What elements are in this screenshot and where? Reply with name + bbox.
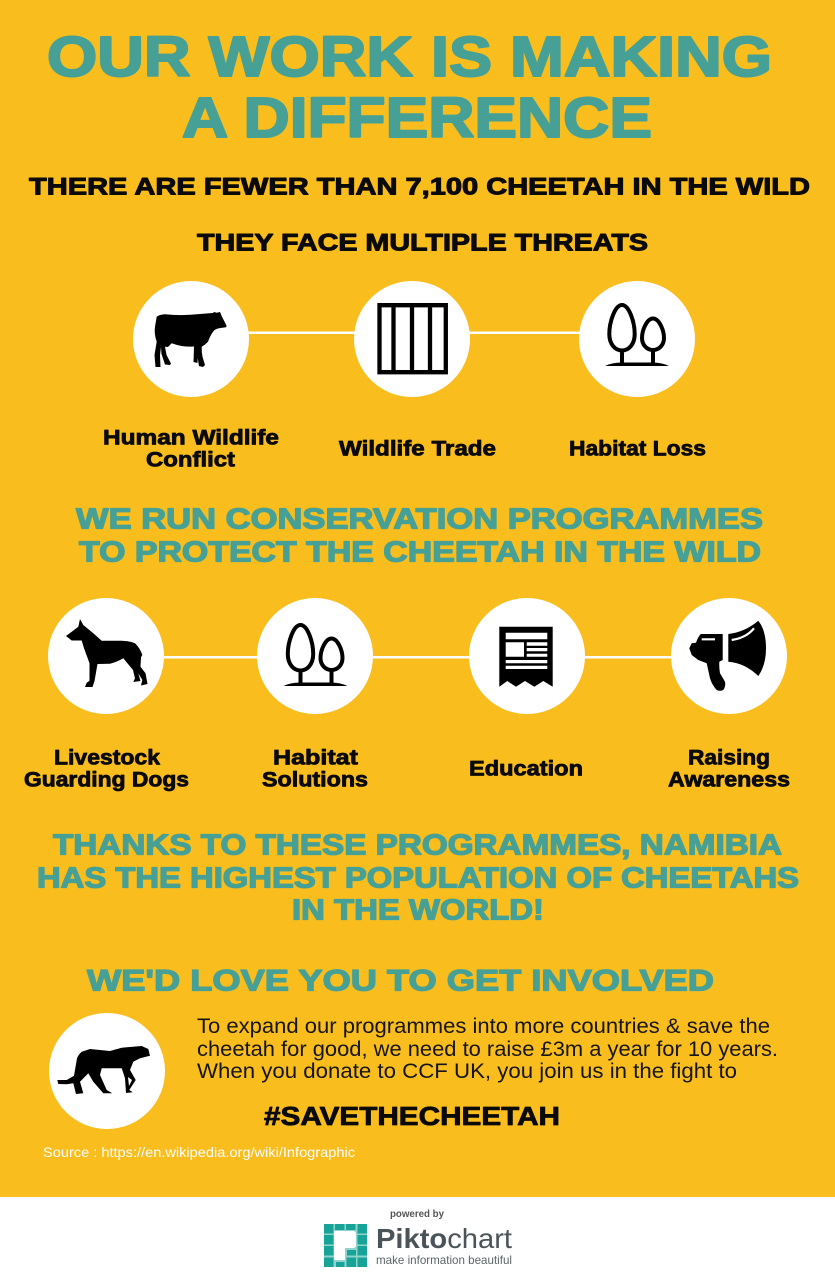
label: raising awareness [668,746,790,792]
heading: conservation programmes: WE RUN CONSERVATION PROGRAMMES [76,504,763,536]
icon: dog [66,619,148,687]
heading: namibia result: HAS THE HIGHEST POPULATION OF CHEETAHS [37,862,799,894]
label: human wildlife conflict: Human Wildlife [103,426,279,450]
icon: cage bars [380,305,446,372]
title: A DIFFERENCE [182,86,652,150]
heading: threats: THEY FACE MULTIPLE THREATS [197,230,648,256]
label: human wildlife conflict: Conflict [146,448,235,472]
threat: human wildlife conflict [103,281,279,472]
panel: get involved [49,1013,778,1131]
label: raising awareness: Raising [688,746,770,770]
panel: programmes [24,598,790,792]
heading: namibia result [37,830,799,926]
subtitle: cheetah population: THERE ARE FEWER THAN 7,100 CHEETAH IN THE WILD [29,174,810,200]
text: donation appeal: To expand our programmes into more countries & save the [197,1015,770,1038]
powered by: powered by [390,1208,444,1220]
label: habitat loss: Habitat Loss [569,438,706,460]
label: education: Education [469,758,583,780]
icon: cheetah [57,1046,150,1094]
label: livestock guarding dogs: Livestock [54,746,160,770]
heading: namibia result: IN THE WORLD! [292,894,544,926]
heading: conservation programmes [76,504,763,568]
logo wordmark: Piktochart [376,1223,512,1254]
label: livestock guarding dogs: Guarding Dogs [24,768,189,792]
label: habitat solutions: Habitat [273,746,358,770]
threat: wildlife trade [339,281,496,460]
title: OUR WORK IS MAKING [47,25,772,89]
icon: trees [284,625,348,686]
text: donation appeal [197,1015,778,1083]
logo mark [324,1224,367,1267]
label: human wildlife conflict [103,426,279,472]
title [47,25,772,150]
label: habitat solutions [262,746,368,792]
icon: cow [154,312,227,367]
programme: livestock guarding dogs [24,598,189,792]
text: donation appeal: When you donate to CCF UK, you join us in the fight to [197,1060,737,1083]
panel: threats [103,281,706,472]
heading: conservation programmes: TO PROTECT THE CHEETAH IN THE WILD [79,536,761,568]
icon: newspaper [499,627,553,687]
programme: habitat solutions [257,598,373,792]
label: raising awareness: Awareness [668,768,790,792]
footer [0,1197,835,1280]
threat: habitat loss [569,281,706,460]
programme: raising awareness [668,598,790,792]
label: livestock guarding dogs [24,746,189,792]
hashtag: #SAVETHECHEETAH [264,1101,560,1131]
icon: trees [605,305,669,366]
label: habitat solutions: Solutions [262,768,368,792]
heading: namibia result: THANKS TO THESE PROGRAMMES, NAMIBIA [53,830,782,862]
text: donation appeal: cheetah for good, we need to raise £3m a year for 10 years. [197,1038,778,1061]
logo tagline: make information beautiful [376,1253,512,1267]
source: Source : https://en.wikipedia.org/wiki/Infographic [43,1144,355,1160]
heading: get involved: WE'D LOVE YOU TO GET INVOLVED [87,964,714,998]
label: wildlife trade: Wildlife Trade [339,438,496,460]
icon: megaphone [689,621,766,691]
programme: education [469,598,585,780]
